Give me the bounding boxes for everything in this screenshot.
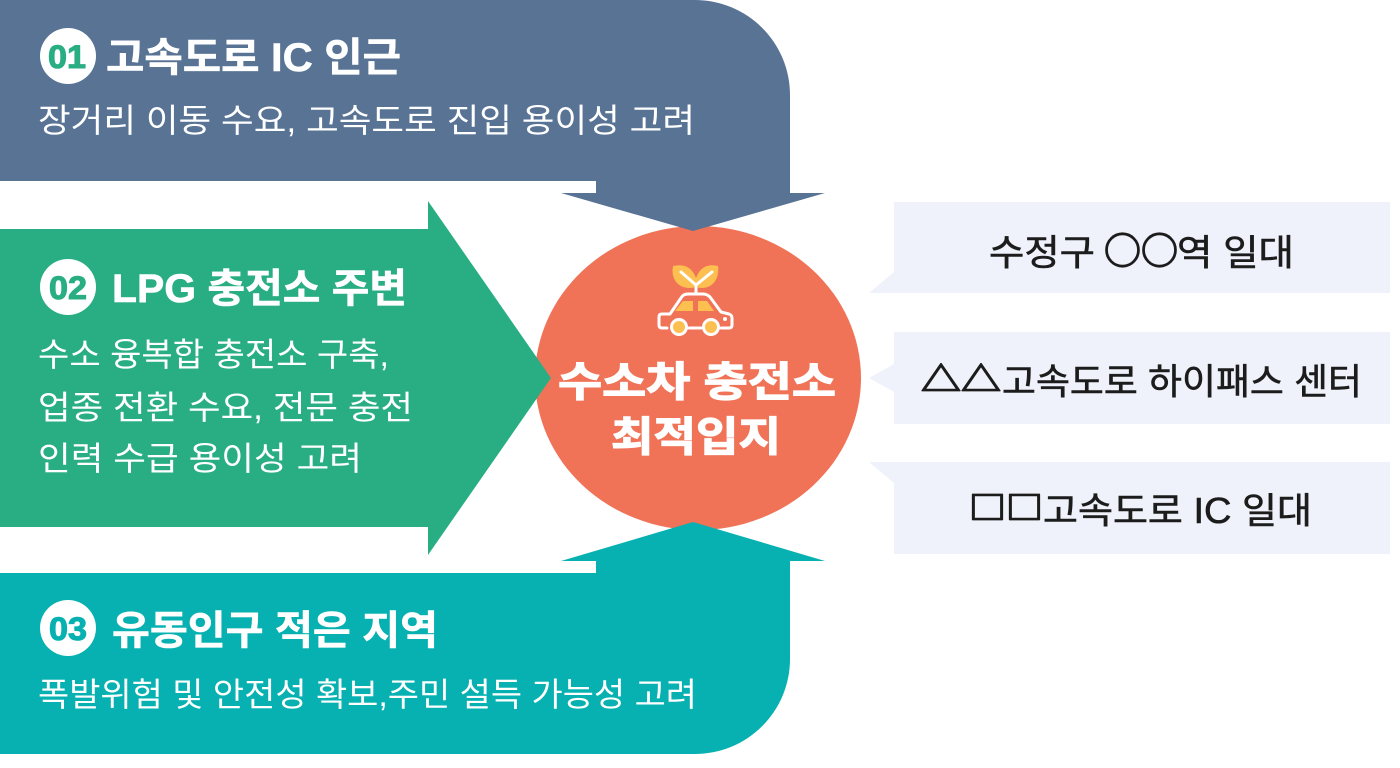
badge 03 — [40, 600, 96, 656]
heading 02: LPG 충전소 주변 — [112, 267, 407, 311]
callout: location 2: 고속도로 하이패스 센터 — [1002, 361, 1362, 402]
badge 03: 03 — [49, 611, 87, 647]
panel: 02 LPG station — [0, 201, 551, 555]
badge 01 — [40, 28, 96, 84]
center title: 수소차 충전소 — [558, 359, 836, 405]
heading 01: 고속도로 IC 인근 — [106, 36, 401, 80]
callout: location 1: 수정구 — [989, 232, 1095, 273]
description 01: 장거리 이동 수요, 고속도로 진입 용이성 고려 — [38, 102, 695, 139]
callout: location 1: ○○ — [1104, 221, 1178, 275]
panel: 01 highway IC — [0, 0, 825, 231]
callout: location 1 — [869, 202, 1390, 293]
badge 01: 01 — [48, 39, 86, 75]
description 02 — [38, 336, 413, 477]
center circle — [535, 226, 861, 530]
badge 02 — [40, 259, 96, 315]
description 03: 폭발위험 및 안전성 확보,주민 설득 가능성 고려 — [38, 676, 697, 713]
center title: 최적입지 — [611, 414, 781, 460]
description 02: 업종 전환 수요, 전문 충전 — [38, 389, 413, 426]
callout: location 1: 역 일대 — [1177, 232, 1294, 273]
callout: location 3: 고속도로 IC 일대 — [1043, 490, 1312, 531]
heading 03: 유동인구 적은 지역 — [112, 609, 438, 653]
callout: location 3: □□ — [969, 483, 1043, 528]
panel: 03 low population — [0, 522, 825, 754]
description 02: 수소 융복합 충전소 구축, — [38, 336, 389, 373]
callout: location 2 — [869, 332, 1390, 424]
description 02: 인력 수급 용이성 고려 — [38, 440, 362, 477]
callout: location 2: △△ — [921, 353, 1001, 401]
icon: car with sprout — [659, 265, 732, 334]
center title — [558, 359, 836, 460]
callout: location 3 — [869, 462, 1390, 554]
badge 02: 02 — [49, 270, 87, 306]
